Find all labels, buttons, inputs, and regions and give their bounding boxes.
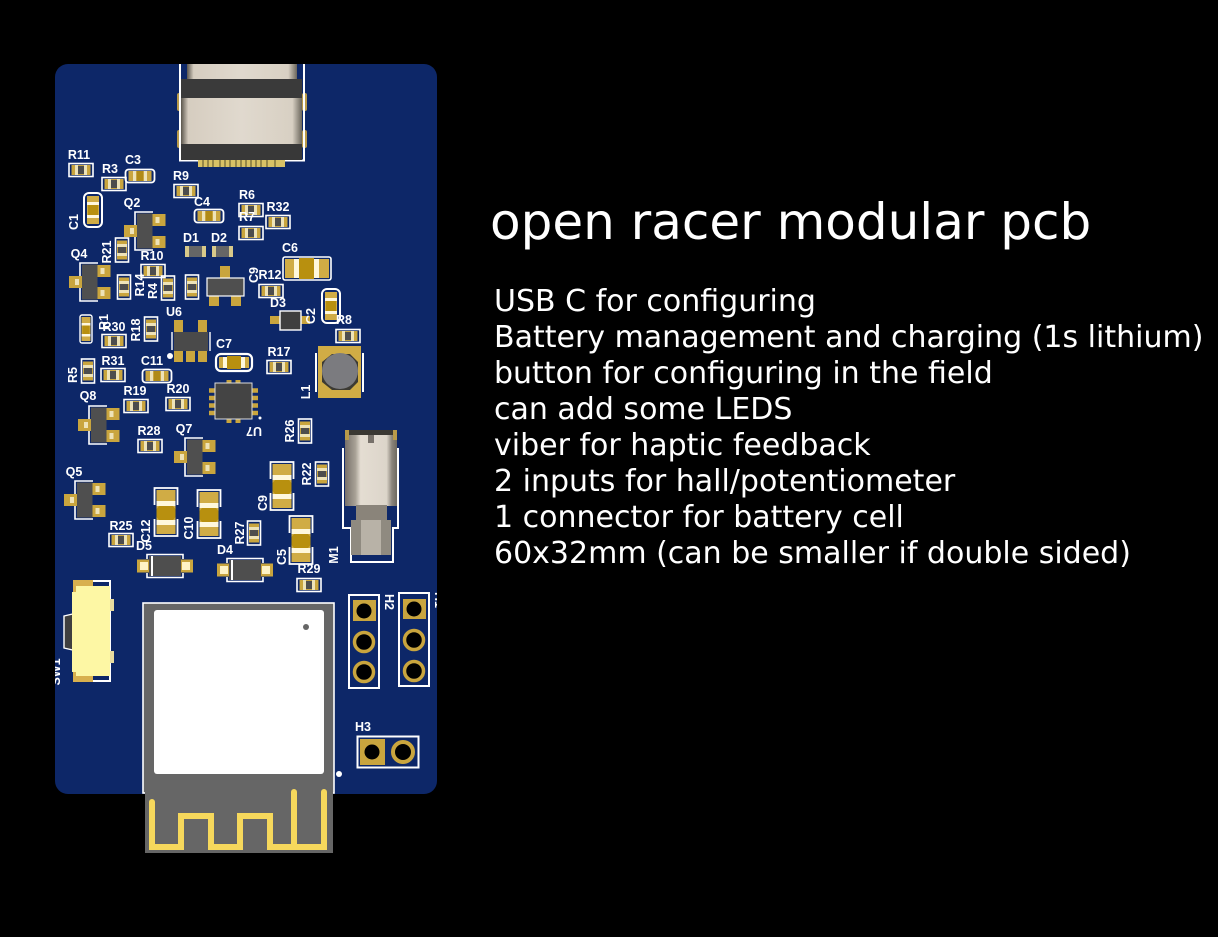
feature list [494, 284, 1203, 571]
component R3: R3 [102, 162, 118, 176]
header H2: H2 [382, 594, 396, 610]
component D3: D3 [270, 296, 286, 310]
component R22 [300, 462, 328, 486]
diode D4: D4 [217, 543, 233, 557]
component Q2 [124, 196, 166, 250]
component R31: R31 [102, 354, 125, 368]
component R7: R7 [239, 210, 255, 224]
component R19: R19 [124, 384, 147, 398]
component R14: R14 [133, 273, 147, 296]
component R28: R28 [138, 424, 161, 438]
component C9: C9 [256, 495, 270, 511]
white pin marker [336, 771, 342, 777]
component D2 [211, 231, 233, 257]
component C4: C4 [194, 195, 210, 209]
component Q4: Q4 [71, 247, 87, 261]
feature list: Battery management and charging (1s lithium) [494, 320, 1203, 355]
feature list: 2 inputs for hall/potentiometer [494, 464, 956, 499]
component C2 [304, 289, 340, 324]
component C3 [125, 153, 154, 182]
component Q4 [69, 247, 110, 301]
component R26: R26 [283, 419, 297, 442]
component D3 [270, 296, 310, 330]
feature list: USB C for configuring [494, 284, 816, 319]
component C7 [216, 337, 252, 371]
component C9 [256, 462, 294, 511]
component C5 [275, 516, 312, 565]
header H1: H1 [432, 592, 446, 608]
feature list: viber for haptic feedback [494, 428, 871, 463]
component C12 [139, 488, 178, 542]
component R12 [247, 267, 283, 298]
component R3 [102, 162, 126, 190]
component C12: C12 [139, 519, 153, 542]
component R4 [146, 276, 174, 300]
component C6: C6 [282, 241, 298, 255]
inductor L1: L1 [299, 385, 313, 399]
component C11: C11 [141, 354, 163, 368]
transistor Q8 [78, 389, 120, 444]
component Q2: Q2 [124, 196, 140, 210]
vibration motor M1 [327, 430, 398, 564]
component C10 [182, 490, 220, 539]
component C10: C10 [182, 516, 196, 539]
diode D5 [136, 539, 193, 578]
component R9 [173, 169, 198, 198]
component D1: D1 [183, 231, 199, 245]
board [55, 64, 437, 794]
component R29 [297, 562, 321, 592]
component R27: R27 [233, 521, 247, 544]
component R18: R18 [129, 318, 143, 341]
component R8 [336, 313, 360, 342]
component R25 [109, 519, 133, 546]
component R11: R11 [68, 148, 90, 162]
component R19 [124, 384, 148, 412]
switch SW1: SW1 [49, 658, 63, 686]
component R17 [267, 345, 291, 374]
component R18 [129, 317, 158, 341]
transistor Q8: Q8 [80, 389, 96, 403]
diode D5: D5 [136, 539, 152, 553]
infographic canvas [55, 64, 1201, 853]
header H3 [355, 720, 418, 768]
component R30: R1 [97, 314, 111, 330]
switch SW1 [49, 580, 114, 686]
module shield can [154, 610, 324, 774]
transistor Q5: Q5 [66, 465, 82, 479]
component R10 [141, 249, 165, 278]
component C1 [67, 193, 102, 230]
component R5 [66, 359, 94, 383]
component R8: R8 [336, 313, 352, 327]
component D1 [183, 231, 206, 257]
component R11 [68, 148, 93, 176]
component R29: R29 [298, 562, 321, 576]
component R20 [166, 382, 190, 410]
component R7 [239, 210, 263, 240]
feature list: 60x32mm (can be smaller if double sided) [494, 536, 1131, 571]
component R14 [118, 273, 147, 299]
component R17: R17 [268, 345, 291, 359]
component R27 [233, 521, 260, 545]
header H3: H3 [355, 720, 371, 734]
component C2: C2 [304, 308, 318, 324]
component R26 [283, 419, 312, 443]
component Q3 [207, 266, 244, 306]
component R21 [100, 238, 128, 263]
component C1: C1 [67, 214, 81, 230]
diode D4 [217, 543, 273, 582]
transistor Q7 [174, 422, 216, 476]
component R10: R10 [141, 249, 164, 263]
component R12: C9 [247, 267, 261, 283]
component R15 [80, 315, 92, 343]
component R20: R20 [167, 382, 190, 396]
component R12: R12 [259, 268, 282, 282]
feature list: can add some LEDS [494, 392, 792, 427]
component C5: C5 [275, 549, 289, 565]
chip U6: U6 [166, 305, 182, 319]
component C11 [141, 354, 172, 382]
component R32: R32 [267, 200, 290, 214]
component R22: R22 [300, 462, 314, 485]
header H1 [398, 592, 437, 687]
component C7: C7 [216, 337, 232, 351]
chip U6 [166, 305, 210, 362]
feature list: 1 connector for battery cell [494, 500, 904, 535]
component R4: R4 [146, 283, 160, 299]
PCB antenna [152, 792, 324, 847]
component R30 [97, 314, 126, 348]
ESP module [143, 603, 334, 853]
component R9: R9 [173, 169, 189, 183]
component R21: R21 [100, 240, 114, 263]
transistor Q7: Q7 [176, 422, 192, 436]
component C3: C3 [125, 153, 141, 167]
component D2: D2 [211, 231, 227, 245]
component R6 [239, 188, 263, 216]
component R28 [138, 424, 162, 452]
component C8 [186, 275, 198, 299]
chip U7 [209, 380, 262, 438]
feature list: button for configuring in the field [494, 356, 993, 391]
component R31 [101, 354, 125, 382]
component R5: R5 [66, 367, 80, 383]
inductor L1 [299, 346, 363, 399]
header H2 [349, 594, 396, 688]
transistor Q5 [64, 465, 106, 519]
chip U7: U7 [246, 424, 262, 438]
USB C connector [177, 64, 307, 167]
component R6: R6 [239, 188, 255, 202]
component R30: R30 [103, 320, 126, 334]
vibration motor M1: M1 [327, 546, 341, 564]
title: open racer modular pcb [490, 193, 1091, 251]
component R25: R25 [110, 519, 133, 533]
component C4 [194, 195, 224, 222]
component R32 [266, 200, 290, 228]
component C6 [282, 241, 331, 280]
